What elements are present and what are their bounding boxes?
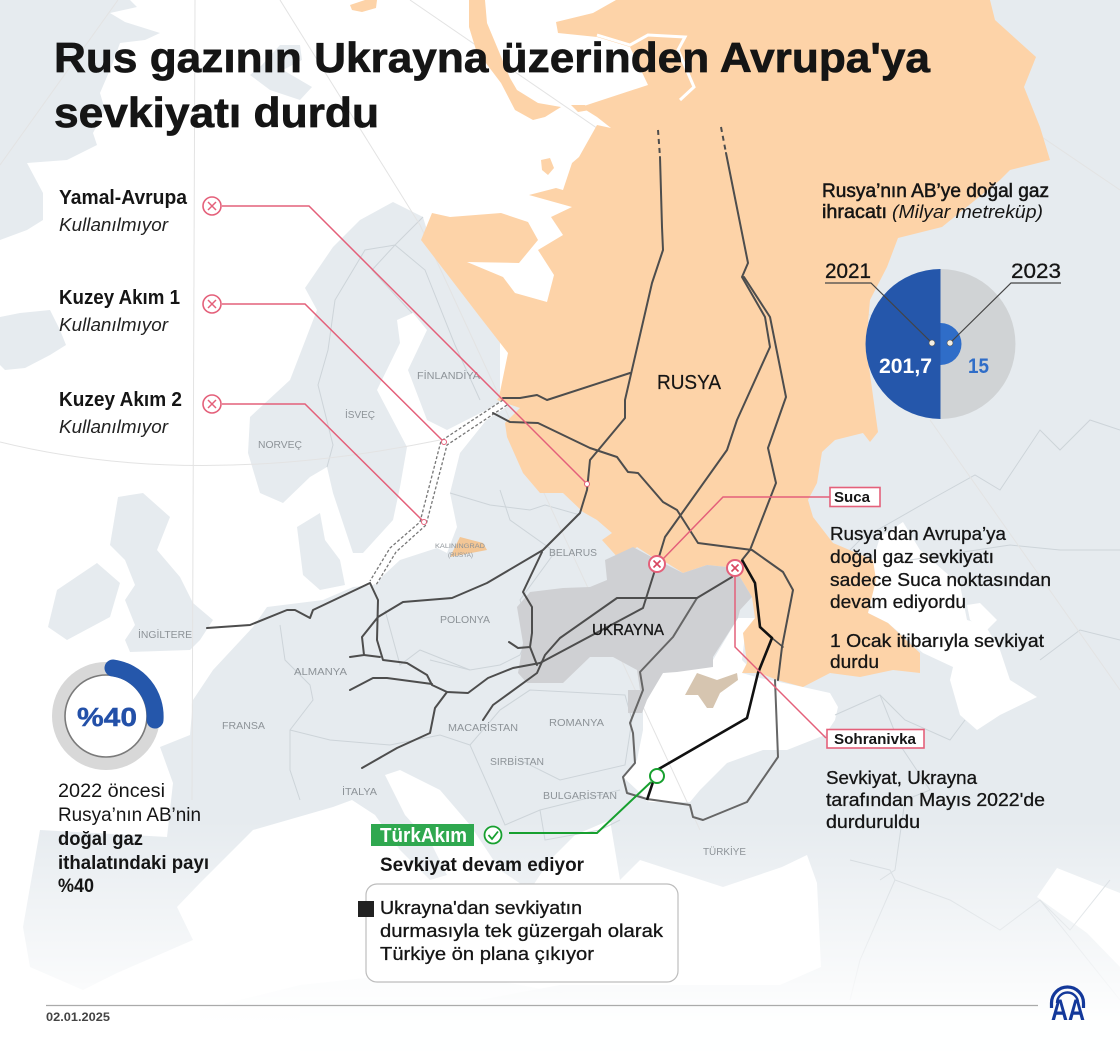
title: sevkiyatı durdu [54, 89, 379, 136]
white inlet [597, 35, 694, 100]
callout: Kuzey Akım 2: Kullanılmıyor [59, 416, 169, 437]
note box: Türkiye route [358, 884, 678, 982]
country labels: MACARİSTAN [448, 721, 518, 734]
country labels: ALMANYA [294, 667, 347, 678]
graticule [0, 0, 1120, 830]
country labels: TÜRKİYE [703, 845, 746, 858]
callout: Kuzey Akım 1 [59, 287, 446, 444]
text: Suca explanation: durdu [830, 651, 879, 672]
map label: Ukrayna: UKRAYNA [592, 622, 664, 639]
callout: Yamal-Avrupa: Yamal-Avrupa [59, 187, 188, 209]
text: Suca explanation: 1 Ocak itibarıyla sevkiyat [830, 630, 1044, 651]
pipeline: Yamal route [350, 157, 663, 657]
pipeline: Germany and Britain lines [207, 583, 540, 693]
pipeline: west-east Russia route [493, 413, 793, 680]
sea: Kara Bogaz detail [967, 603, 997, 632]
text: import share caption: doğal gaz [58, 828, 143, 850]
half circle: 2021 [866, 269, 940, 419]
chart heading: ihracatı [822, 202, 887, 223]
note text [380, 897, 664, 964]
half circle: 2023 scale [940, 269, 1015, 419]
pipeline: Finland branch [503, 373, 630, 400]
country labels: İSVEÇ [345, 408, 375, 421]
leader: 2023 [947, 260, 1061, 346]
country labels: FRANSA [222, 721, 265, 732]
icon: AA logo: AA [1051, 994, 1085, 1027]
callout: Kuzey Akım 2 [59, 389, 426, 524]
land: Scandinavia and Finland [248, 202, 500, 553]
country labels: İNGİLTERE [138, 628, 192, 641]
text: Suca explanation [830, 523, 1051, 672]
region: Kaliningrad [450, 537, 487, 557]
text: Sohranivka explanation [826, 767, 1045, 832]
leader: 2023: 2023 [1011, 260, 1061, 283]
country labels: ROMANYA [549, 718, 604, 729]
callout: Kuzey Akım 1: Kuzey Akım 1 [59, 287, 180, 309]
donut chart: %40 [52, 662, 160, 770]
text: import share caption: ithalatındaki payı [58, 852, 209, 874]
title [54, 34, 931, 136]
land: Svalbard [250, 45, 312, 100]
map borders [280, 217, 1120, 1000]
country labels: İTALYA [342, 785, 377, 798]
country labels: BULGARİSTAN [543, 789, 617, 802]
small half circle: 2023 [940, 323, 962, 365]
pipeline: Central European branches [350, 552, 783, 768]
land: Greenland [0, 0, 160, 240]
text: Sohranivka explanation: Sevkiyat, Ukrayna [826, 767, 978, 788]
footer rule [46, 1004, 1038, 1006]
country labels: (RUSYA) [448, 553, 473, 559]
pipeline: eastern double route [742, 277, 786, 560]
leader: 2021: 2021 [825, 260, 871, 283]
text: import share caption: 2022 öncesi [58, 780, 165, 802]
callout: Yamal-Avrupa: Kullanılmıyor [59, 214, 169, 235]
callout: Kuzey Akım 2: Kuzey Akım 2 [59, 389, 182, 411]
pipelines: Nord Stream dashed routes [370, 400, 507, 585]
country labels: KALININGRAD [435, 544, 486, 550]
callout: TürkAkım: TürkAkım [380, 825, 467, 847]
callout: Yamal-Avrupa [59, 187, 590, 486]
pipeline: Ukraine transit [483, 577, 732, 720]
callout: Sohranivka entry point: Sohranivka [834, 731, 917, 748]
pipeline: northern dashed stubs [658, 127, 726, 157]
pipeline: Black Sea ring route [623, 598, 778, 820]
land: Denmark [297, 513, 345, 590]
value: 15: 15 [968, 355, 989, 378]
land: North Africa [200, 970, 700, 1051]
country labels: NORVEÇ [258, 440, 302, 451]
note text: Türkiye ön plana çıkıyor [380, 943, 594, 964]
icon: black square bullet [358, 901, 374, 917]
pipeline: TurkStream [647, 560, 772, 800]
callout: Sohranivka entry point [727, 560, 924, 748]
callout: TürkAkım [371, 769, 664, 876]
text: Suca explanation: doğal gaz sevkiyatı [830, 546, 994, 567]
sea: Black Sea [623, 618, 838, 802]
country labels: FİNLANDİYA [417, 369, 480, 382]
country labels: SIRBİSTAN [490, 755, 544, 768]
country labels: POLONYA [440, 615, 490, 626]
map label: Rusya: RUSYA [657, 372, 722, 394]
icon: AA logo [1051, 987, 1085, 1027]
country labels [138, 369, 746, 858]
chart heading [822, 181, 1049, 223]
region: Crimea [685, 673, 738, 708]
Russia: small islands [350, 0, 590, 175]
note text: durmasıyla tek güzergah olarak [380, 920, 664, 941]
pipeline: central Russia route [540, 153, 770, 663]
text: Suca explanation: devam ediyordu [830, 591, 966, 612]
text: import share caption: Rusya’nın AB’nin [58, 804, 201, 826]
title: Rus gazının Ukrayna üzerinden Avrupa'ya [54, 34, 931, 81]
callout: TürkAkım: Sevkiyat devam ediyor [380, 855, 585, 876]
text: import share caption [58, 780, 209, 897]
donut chart: %40: %40 [77, 702, 137, 732]
callout: Suca entry point: Suca [834, 489, 871, 506]
panel: export comparison chart [822, 181, 1061, 419]
region: Ukraine [517, 547, 752, 713]
note text: Ukrayna'dan sevkiyatın [380, 897, 582, 918]
callout: Kuzey Akım 1: Kullanılmıyor [59, 314, 169, 335]
text: Suca explanation: Rusya’dan Avrupa’ya [830, 523, 1007, 544]
callout: Suca entry point [649, 488, 880, 572]
text: import share caption: %40 [58, 875, 94, 897]
chart heading: (Milyar metreküp) [892, 201, 1043, 222]
land: Iceland [0, 310, 66, 370]
text: Suca explanation: sadece Suca noktasından [830, 569, 1051, 590]
pipeline network [207, 127, 793, 820]
region: Russia [421, 0, 1050, 687]
value: 201,7: 201,7 [879, 355, 932, 378]
chart heading: Rusya’nın AB’ye doğal gaz [822, 181, 1049, 202]
panel: Russia import share [52, 662, 209, 897]
country labels: BELARUS [549, 548, 597, 559]
leader: 2021 [825, 260, 935, 346]
land: Ireland [48, 563, 120, 640]
date: 02.01.2025 [46, 1012, 111, 1024]
sea: Caspian Sea [868, 522, 1037, 730]
text: Sohranivka explanation: durduruldu [826, 811, 920, 832]
text: Sohranivka explanation: tarafından Mayıs 2022'de [826, 789, 1045, 810]
land: Britain [110, 493, 213, 652]
Russia: northern island strip [469, 0, 561, 120]
